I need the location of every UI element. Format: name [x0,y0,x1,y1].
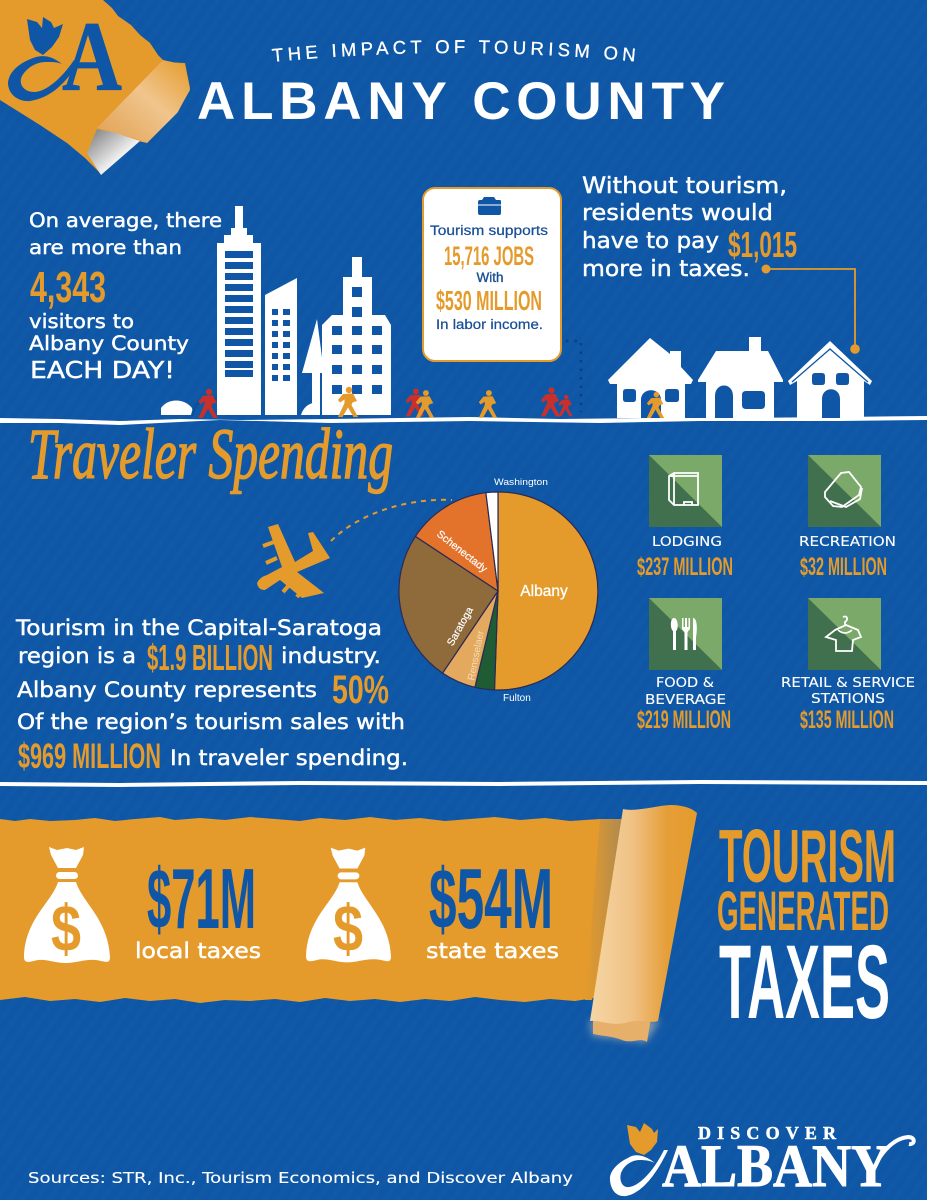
pie labels: Albany [520,583,568,600]
taxes text block: have to pay [582,229,719,254]
slanted building [265,278,297,415]
regional tourism paragraph: region is a [18,644,136,668]
visitors text block: EACH DAY! [30,358,175,384]
house two [698,337,783,418]
walker: orange pair [416,390,434,418]
slice: Schenectady [415,493,498,591]
walker in doorway [647,392,664,418]
visitors text block: On average, there [29,209,222,232]
jobs card: In labor income. [436,317,543,332]
category: food and beverage: BEVERAGE [645,693,726,708]
icon: lodging tile [649,455,722,527]
divider [0,780,927,787]
dotted vertical line [566,341,581,412]
title line one: THE IMPACT OF TOURISM ON [272,40,635,62]
state caption: state taxes [426,939,559,963]
category: lodging: LODGING [652,535,722,550]
logo word albany: ALBANY [662,1133,890,1199]
local caption: local taxes [135,939,261,963]
logo tulip [27,17,63,55]
category: food and beverage: FOOD & [656,676,714,691]
walking people [198,387,573,418]
visitors text block: visitors to [29,310,134,333]
regional tourism paragraph: industry. [281,644,381,668]
slice: Saratoga [399,536,498,673]
money bag: state [306,848,391,965]
title line two: ALBANY COUNTY [197,72,725,131]
slice: Washington [486,492,498,591]
logo word discover: DISCOVER [698,1123,837,1143]
window building [322,257,391,415]
scroll glow [590,1020,660,1042]
icon: retail tile [808,598,881,670]
category: recreation [799,455,896,581]
tax amount: $1,015 [728,224,797,265]
Discover Albany logo [610,1123,914,1199]
logo tulip mark [627,1123,658,1155]
money bag: local: $ [51,891,81,965]
logo swash right [878,1137,914,1160]
slice: Rensselaer [443,591,498,687]
state amount: $54M [429,852,553,947]
tall tower [217,206,261,415]
ground line [0,416,927,425]
visitors text block [29,209,222,384]
category: retail and service stations: RETAIL & SERVICE [781,676,915,691]
slice: Fulton [475,591,498,690]
tax banner [0,805,697,1042]
category: retail and service stations [781,598,915,734]
torn orange banner [0,817,630,1003]
visitors number: 4,343 [30,263,106,312]
logo letter A: A [62,1,122,112]
icon: briefcase [478,197,501,215]
connector line to house [762,264,860,354]
banner fold shadow [585,819,622,1000]
dashed flight path [331,500,452,541]
jobs card [423,188,561,361]
jobs card: With [476,270,504,285]
logo swirl [8,56,80,101]
jobs number: 15,716 JOBS [444,241,534,271]
walker: red pair [406,389,424,416]
money bag: state: $ [333,891,363,965]
regional tourism paragraph: Tourism in the Capital-Saratoga [15,616,382,640]
title [197,40,725,131]
regional tourism paragraph: Of the region’s tourism sales with [17,710,405,734]
walker: red large [541,387,560,416]
taxes text block: residents would [582,201,773,226]
icon: recreation tile [808,455,881,527]
tree [302,319,324,415]
industry value: $1.9 BILLION [147,637,273,678]
spending value: $969 MILLION [18,737,161,776]
logo swash left [610,1150,668,1196]
local amount: $71M [147,852,256,947]
regional tourism paragraph: In traveler spending. [170,746,408,770]
icon: airplane [257,524,330,598]
visitors text block: Albany County [29,332,189,355]
taxes text block: more in taxes. [582,257,750,282]
food amount: $219 MILLION [637,706,731,734]
pie labels: Schenectady [434,528,490,576]
houses [608,337,872,418]
category: lodging [637,455,733,581]
walker: red [198,389,218,418]
labor income number: $530 MILLION [436,285,542,316]
lodging amount: $237 MILLION [637,553,733,581]
pie labels: Saratoga [445,605,476,648]
house one [608,338,693,418]
logo: torn orange corner with A and tulip [0,0,190,175]
section heading: traveler spending: Traveler Spending [28,414,393,494]
sources: Sources: STR, Inc., Tourism Economics, and Discover Albany [28,1169,573,1187]
slice: Albany [494,492,598,690]
regional tourism paragraph: Albany County represents [17,678,317,702]
pie labels [434,477,568,704]
visitors text block: are more than [29,236,182,259]
walker: red small [558,395,573,416]
scroll roll [590,805,697,1042]
taxes text block: Without tourism, [582,174,787,199]
house three [788,341,872,418]
city skyline [161,206,391,416]
pie labels: Rensselaer [466,629,487,681]
pie labels: Fulton [503,693,531,704]
category: food and beverage [637,598,731,734]
heading: tourism generated taxes [717,814,896,1041]
dome [161,400,193,415]
money bag: local [24,847,110,965]
regional tourism paragraph [15,616,408,776]
jobs card: Tourism supports [430,223,548,238]
regional spending pie chart [399,492,598,690]
taxes text block [582,174,797,282]
category: recreation: RECREATION [799,535,896,550]
icon: food tile [649,598,722,670]
share value: 50% [332,668,389,712]
category: retail and service stations: STATIONS [811,692,885,707]
pie labels: Washington [494,477,548,488]
walker: orange [338,387,358,417]
walker: orange single [479,390,497,418]
